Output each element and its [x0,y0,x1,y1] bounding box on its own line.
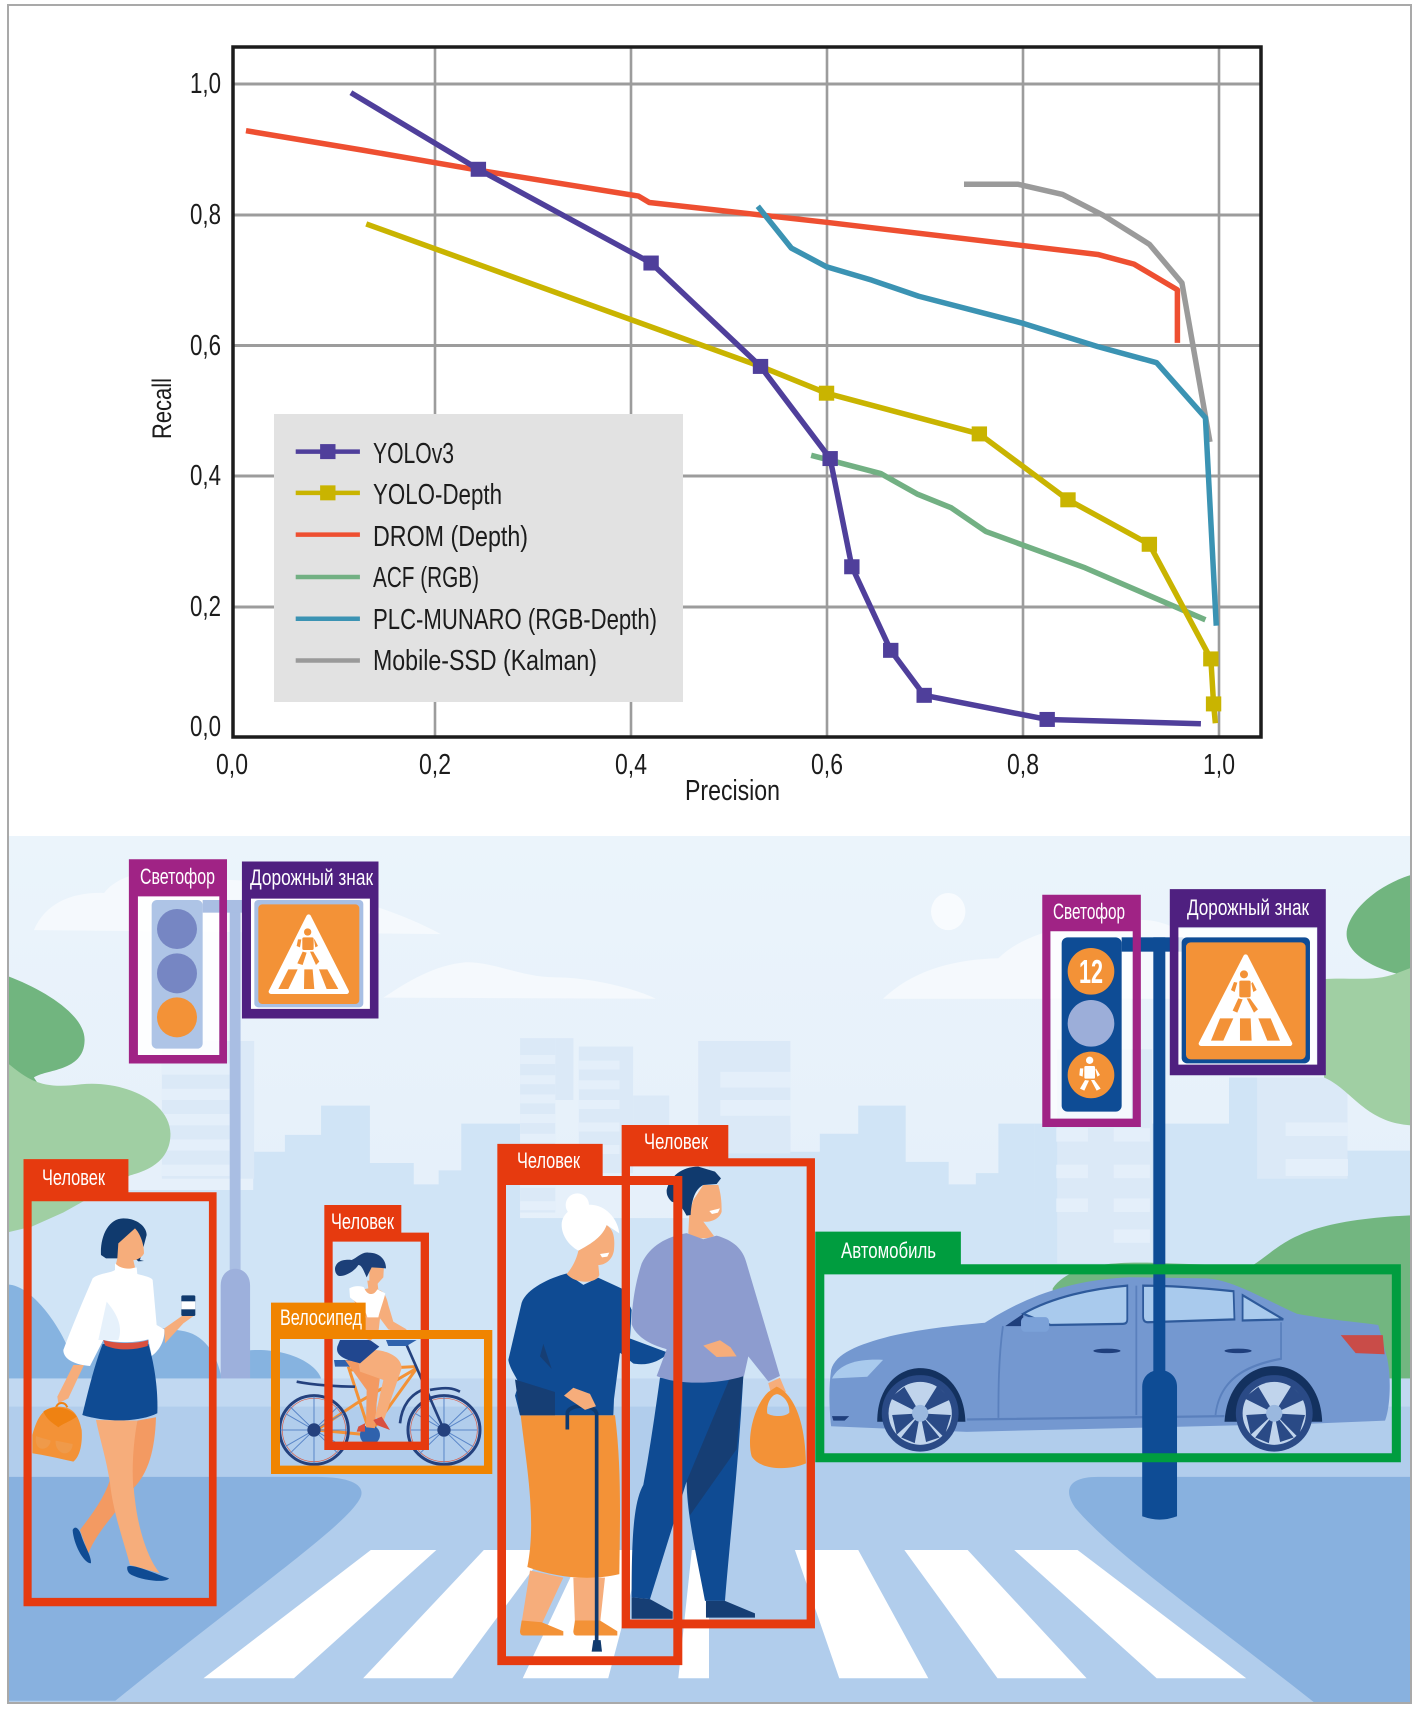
chart curves [246,93,1221,727]
legend: Mobile-SSD (Kalman) [373,645,597,677]
left traffic light [137,895,254,1055]
x axis tick labels: 1,0 [1203,749,1235,781]
plot frame [233,47,1261,737]
car [829,1277,1390,1452]
figure: elderly woman with cane [508,1193,668,1652]
figure: cyclist on bicycle [280,1253,480,1464]
detection box: traffic light right: Светофор [1053,899,1125,924]
detection box: person man [622,1125,815,1628]
legend: ACF (RGB) [373,562,479,594]
man body [632,1233,806,1619]
detection box: traffic light right [1042,895,1141,1127]
figure: man with bag [632,1167,806,1619]
detection box: car [815,1232,1401,1462]
panel: precision-recall chart [147,47,1261,807]
plot grid [233,47,1261,737]
x axis tick labels: 0,0 [216,749,248,781]
y axis title: Recall [147,378,177,439]
legend: YOLO-Depth [373,479,502,511]
detection box: person elderly woman: Человек [517,1148,580,1173]
detection box: road sign right: Дорожный знак [1187,895,1309,920]
y axis tick labels: 0,4 [190,460,221,492]
y axis tick labels [190,68,221,743]
y axis tick labels: 0,6 [190,330,221,362]
legend [274,414,683,702]
y axis tick labels: 0,8 [190,199,221,231]
detection box: person cyclist [324,1205,429,1450]
legend: DROM (Depth) [373,521,528,553]
x axis tick labels [216,749,1235,781]
x axis tick labels: 0,6 [811,749,843,781]
detection box: road sign right [1170,889,1326,1075]
x axis title: Precision [685,775,780,807]
legend: PLC-MUNARO (RGB-Depth) [373,604,657,636]
legend: YOLOv3 [373,438,454,470]
detection box: traffic light left: Светофор [140,864,215,889]
detection box: person cyclist: Человек [331,1209,394,1234]
y axis tick labels: 0,0 [190,711,221,743]
right part of background [709,875,1411,1703]
left part of background [8,872,770,1703]
detection box: road sign left [242,862,378,1018]
right road sign [1178,928,1317,1065]
detection box: car: Автомобиль [841,1238,936,1263]
detection box: traffic light left [129,859,227,1063]
right traffic light: 12 [1079,953,1103,990]
detection box: person elderly woman [497,1144,682,1665]
right traffic light [1062,937,1122,1112]
figure: woman with bag [32,1218,195,1581]
y axis tick labels: 0,2 [190,591,221,623]
detection box: person woman [24,1159,217,1606]
left road sign [251,898,370,1010]
right pole base [1142,1370,1177,1520]
left pole [221,900,250,1396]
detection box: road sign left: Дорожный знак [250,865,373,890]
man head [667,1167,722,1238]
detection box: person man: Человек [644,1129,708,1154]
elderly woman head [562,1193,619,1282]
x axis tick labels: 0,4 [615,749,647,781]
x axis tick labels: 0,8 [1007,749,1039,781]
detection box: bicycle: Велосипед [280,1305,362,1330]
x axis tick labels: 0,2 [419,749,451,781]
panel: street scene background [8,836,1411,1703]
y axis tick labels: 1,0 [190,68,221,100]
detection box: person woman: Человек [42,1165,105,1190]
right traffic pole [1051,931,1183,1377]
detection box: bicycle [271,1303,492,1474]
